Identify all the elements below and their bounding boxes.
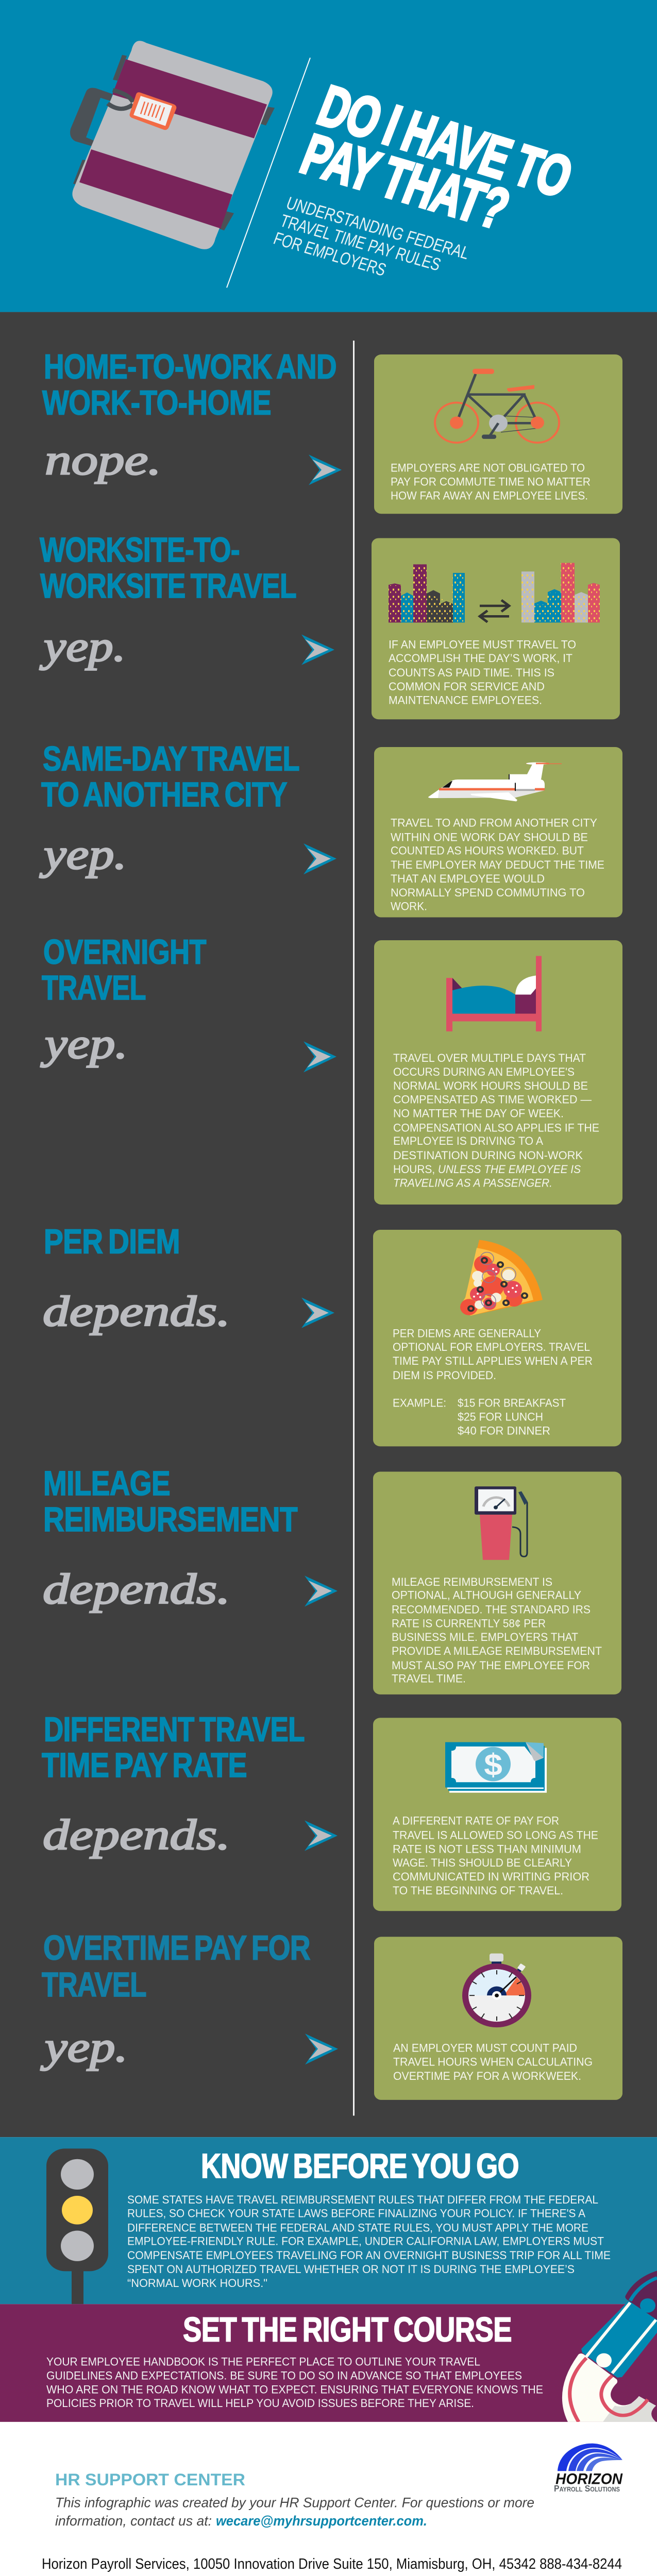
credit text: This infographic was created by your HR Support Center. For questions or more (55, 2495, 534, 2510)
credit text (55, 2495, 534, 2529)
icon: two-way arrows (480, 600, 509, 622)
icon: right city (521, 563, 600, 622)
card text: ACCOMPLISH THE DAY’S WORK, IT (389, 652, 572, 665)
card text: COUNTS AS PAID TIME. THIS IS (389, 666, 554, 679)
arrow (305, 2033, 338, 2064)
subtitle: TRAVEL TIME PAY RULES (277, 211, 443, 275)
icon: money: $ (484, 1748, 502, 1782)
icon: traffic light (46, 2148, 108, 2304)
card text: TRAVEL OVER MULTIPLE DAYS THAT (393, 1052, 586, 1064)
card (374, 747, 622, 918)
card text: $15 FOR BREAKFAST (458, 1396, 566, 1409)
heading (42, 1928, 310, 2004)
heading (41, 739, 299, 814)
panel: per diem (43, 1222, 621, 1446)
heading: TO ANOTHER CITY (41, 775, 287, 814)
card text: OPTIONAL, ALTHOUGH GENERALLY (392, 1589, 581, 1602)
verdict: yep. (40, 2023, 128, 2071)
center divider line (353, 341, 355, 2115)
card text: WITHIN ONE WORK DAY SHOULD BE (391, 831, 588, 843)
card text: PER DIEMS ARE GENERALLY (393, 1327, 541, 1340)
card text: TRAVEL TIME. (392, 1672, 466, 1685)
icon: airplane (428, 762, 562, 802)
card text: EXAMPLE: (393, 1396, 446, 1409)
subtitle: FOR EMPLOYERS (271, 229, 389, 280)
body text: EMPLOYEE-FRIENDLY RULE. FOR EXAMPLE, UNDER CALIFORNIA LAW, EMPLOYERS MUST (127, 2234, 604, 2247)
card (374, 1937, 622, 2100)
body text: YOUR EMPLOYEE HANDBOOK IS THE PERFECT PLACE TO OUTLINE YOUR TRAVEL (46, 2355, 480, 2368)
card text: AN EMPLOYER MUST COUNT PAID (393, 2041, 577, 2054)
heading: KNOW BEFORE YOU GO (201, 2146, 519, 2185)
card text: PROVIDE A MILEAGE REIMBURSEMENT (392, 1645, 602, 1657)
panel: header (0, 0, 657, 312)
card text (393, 2041, 593, 2082)
body text (46, 2355, 543, 2410)
card text (393, 1052, 599, 1190)
card text (389, 638, 576, 706)
heading: WORKSITE TRAVEL (40, 567, 296, 605)
card text (391, 462, 591, 502)
panel: different travel time pay rate (42, 1710, 621, 1911)
arrow (301, 634, 334, 665)
panel: main dark background (0, 312, 657, 2137)
heading (42, 347, 336, 422)
arrow (309, 454, 342, 485)
credit text: information, contact us at: (55, 2513, 212, 2529)
card text (393, 1327, 593, 1437)
title: PAY THAT? (293, 122, 517, 241)
heading: PER DIEM (44, 1222, 180, 1261)
card text: TRAVEL TO AND FROM ANOTHER CITY (391, 816, 597, 829)
verdict: depends. (43, 1811, 230, 1858)
heading: SET THE RIGHT COURSE (183, 2310, 512, 2349)
heading: REIMBURSEMENT (43, 1500, 297, 1539)
card text (393, 1814, 598, 1897)
card text: TO THE BEGINNING OF TRAVEL. (393, 1884, 563, 1897)
card text: TRAVELING AS A PASSENGER. (393, 1177, 552, 1190)
card text: OPTIONAL FOR EMPLOYERS. TRAVEL (393, 1341, 590, 1353)
card text: NO MATTER THE DAY OF WEEK. (393, 1107, 564, 1120)
card text: RATE IS NOT LESS THAN MINIMUM (393, 1842, 581, 1855)
verdict: yep. (39, 831, 127, 878)
heading (42, 933, 206, 1007)
card text: OVERTIME PAY FOR A WORKWEEK. (393, 2070, 581, 2082)
card text: EMPLOYEE IS DRIVING TO A (393, 1134, 544, 1147)
card text: DIEM IS PROVIDED. (393, 1369, 496, 1382)
card text: RATE IS CURRENTLY 58¢ PER (392, 1617, 546, 1630)
panel: same-day travel (39, 739, 622, 918)
arrow (304, 843, 336, 874)
card text: THAT AN EMPLOYEE WOULD (391, 872, 545, 885)
heading: SAME-DAY TRAVEL (43, 739, 299, 778)
subtitle: UNDERSTANDING FEDERAL (283, 194, 472, 263)
panel: overnight travel (40, 933, 622, 1205)
card (373, 1471, 621, 1694)
title: DO I HAVE TO (310, 73, 581, 210)
icon: suitcase (70, 41, 275, 249)
card text: $25 FOR LUNCH (458, 1410, 543, 1423)
card text: OCCURS DURING AN EMPLOYEE'S (393, 1065, 575, 1078)
card text: WAGE. THIS SHOULD BE CLEARLY (393, 1856, 572, 1869)
icon: money (445, 1742, 547, 1793)
card text: NORMALLY SPEND COMMUTING TO (391, 886, 585, 899)
divider line (227, 58, 310, 287)
body text: RULES, SO CHECK YOUR STATE LAWS BEFORE FINALIZING YOUR POLICY. IF THERE'S A (127, 2207, 586, 2220)
card text: HOW FAR AWAY AN EMPLOYEE LIVES. (391, 489, 588, 502)
card text: COMPENSATED AS TIME WORKED — (393, 1093, 592, 1106)
icon: luggage tag (130, 92, 176, 130)
body text: DIFFERENCE BETWEEN THE FEDERAL AND STATE RULES, YOU MUST APPLY THE MORE (127, 2221, 588, 2234)
card text: TIME PAY STILL APPLIES WHEN A PER (393, 1354, 593, 1367)
icon: winding road (562, 2270, 657, 2422)
panel: worksite-to-worksite (39, 530, 620, 719)
card text: WORK. (391, 900, 427, 912)
heading: WORKSITE-TO- (40, 530, 240, 569)
logo: Payroll Solutions (554, 2483, 620, 2494)
heading (43, 1464, 297, 1539)
card text: BUSINESS MILE. EMPLOYERS THAT (392, 1631, 578, 1643)
card (372, 538, 620, 719)
logo: HORIZON (555, 2470, 623, 2487)
heading: MILEAGE (43, 1464, 170, 1502)
body text: SOME STATES HAVE TRAVEL REIMBURSEMENT RULES THAT DIFFER FROM THE FEDERAL (127, 2193, 598, 2206)
panel: know before you go (0, 2137, 657, 2304)
verdict: yep. (39, 622, 126, 670)
card text: PAY FOR COMMUTE TIME NO MATTER (391, 475, 591, 488)
panel: set the right course (0, 2270, 657, 2422)
panel: mileage reimbursement (43, 1464, 621, 1694)
heading: HR SUPPORT CENTER (55, 2470, 245, 2489)
card text: MILEAGE REIMBURSEMENT IS (392, 1575, 552, 1588)
heading: TRAVEL (42, 1965, 146, 2004)
body text: “NORMAL WORK HOURS." (127, 2277, 267, 2290)
card text: COMPENSATION ALSO APPLIES IF THE (393, 1121, 599, 1134)
body text (127, 2193, 611, 2290)
card text: MAINTENANCE EMPLOYEES. (389, 693, 542, 706)
heading: DIFFERENT TRAVEL (44, 1710, 305, 1749)
card text: IF AN EMPLOYEE MUST TRAVEL TO (389, 638, 576, 651)
card text: COUNTED AS HOURS WORKED. BUT (391, 844, 584, 857)
card (373, 1230, 621, 1446)
card text: MUST ALSO PAY THE EMPLOYEE FOR (392, 1659, 590, 1672)
body text: GUIDELINES AND EXPECTATIONS. BE SURE TO DO SO IN ADVANCE SO THAT EMPLOYEES (46, 2369, 522, 2382)
icon: bed (446, 956, 542, 1031)
arrow (301, 1298, 334, 1328)
verdict: yep. (40, 1020, 128, 1067)
card text: A DIFFERENT RATE OF PAY FOR (393, 1814, 559, 1827)
heading: WORK-TO-HOME (42, 383, 271, 422)
card text: RECOMMENDED. THE STANDARD IRS (392, 1603, 591, 1616)
verdict: depends. (43, 1287, 230, 1335)
card text: NORMAL WORK HOURS SHOULD BE (393, 1079, 588, 1092)
heading: TRAVEL (42, 968, 146, 1007)
panel: overtime pay (40, 1928, 622, 2100)
card (374, 940, 622, 1205)
body text: WHO ARE ON THE ROAD KNOW WHAT TO EXPECT. ENSURING THAT EVERYONE KNOWS THE (46, 2383, 543, 2396)
icon: bicycle (435, 369, 559, 443)
card (374, 354, 622, 514)
card text: TRAVEL HOURS WHEN CALCULATING (393, 2055, 593, 2068)
arrow (305, 1820, 338, 1851)
card (373, 1718, 621, 1911)
verdict: nope. (45, 436, 161, 484)
verdict: depends. (43, 1565, 230, 1613)
icon: left city (389, 564, 465, 622)
body text: SPENT ON AUTHORIZED TRAVEL WHETHER OR NOT IT IS DURING THE EMPLOYEE’S (127, 2263, 575, 2276)
heading (40, 530, 296, 605)
card text: COMMUNICATED IN WRITING PRIOR (393, 1870, 589, 1883)
panel: home-to-work (42, 347, 622, 514)
card text: THE EMPLOYER MAY DEDUCT THE TIME (391, 858, 604, 871)
card text: DESTINATION DURING NON-WORK (393, 1149, 583, 1162)
heading: OVERNIGHT (43, 933, 206, 971)
card text: TRAVEL IS ALLOWED SO LONG AS THE (393, 1828, 598, 1841)
card text: EMPLOYERS ARE NOT OBLIGATED TO (391, 462, 585, 474)
logo (554, 2444, 623, 2494)
credit text: wecare@myhrsupportcenter.com. (216, 2513, 427, 2529)
card text (392, 1575, 602, 1685)
card text (391, 816, 604, 912)
heading: OVERTIME PAY FOR (43, 1928, 310, 1967)
panel: footer (0, 2422, 657, 2576)
card text: $40 FOR DINNER (458, 1424, 550, 1437)
heading (42, 1710, 305, 1784)
card text: HOURS, UNLESS THE EMPLOYEE IS (393, 1163, 581, 1176)
card text: COMMON FOR SERVICE AND (389, 680, 545, 693)
icon: stopwatch (462, 1954, 531, 2027)
arrow (304, 1041, 336, 1072)
icon: gas pump (475, 1486, 528, 1560)
heading: TIME PAY RATE (42, 1746, 247, 1784)
body text: POLICIES PRIOR TO TRAVEL WILL HELP YOU AVOID ISSUES BEFORE THEY ARISE. (46, 2397, 474, 2410)
heading: HOME-TO-WORK AND (44, 347, 336, 386)
arrow (305, 1575, 338, 1607)
icon: pizza slice (460, 1240, 543, 1316)
